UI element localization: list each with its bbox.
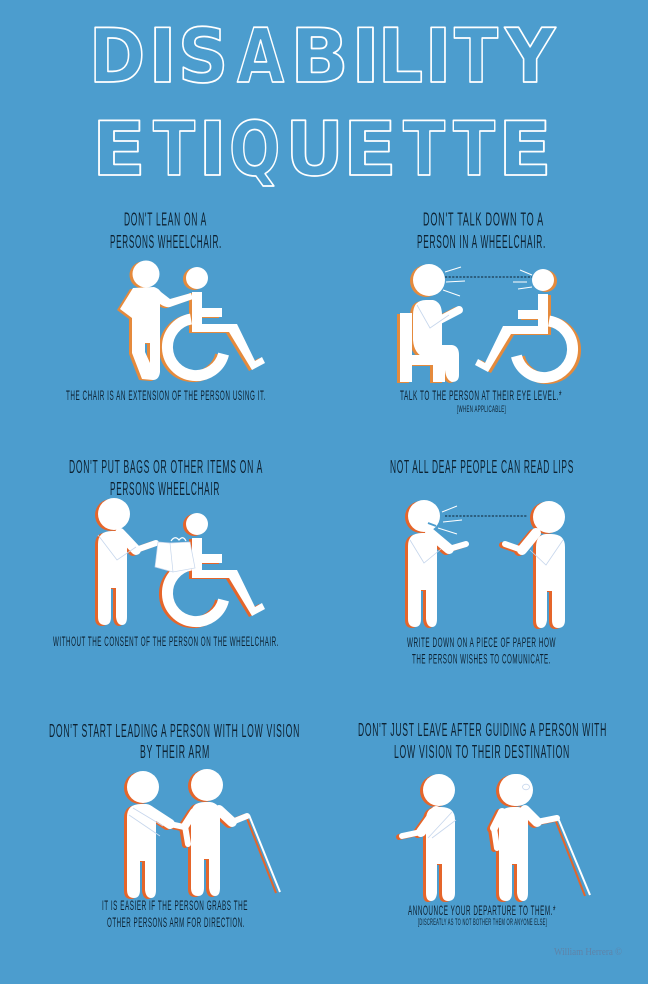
title: L (378, 12, 423, 100)
icon: person leaning on wheelchair (117, 260, 265, 381)
caption (407, 634, 556, 666)
icon: person placing bag on wheelchair (95, 498, 265, 626)
heading: PERSONS WHEELCHAIR (110, 479, 220, 499)
heading (417, 210, 546, 252)
icon: guide and person with cane (399, 774, 590, 902)
panel: don't lead by the arm (49, 721, 300, 930)
heading: BY THEIR ARM (140, 742, 210, 762)
panel: don't lean (66, 210, 266, 403)
title: S (178, 12, 229, 100)
title: T (454, 12, 498, 100)
title: I (351, 12, 380, 100)
title: D (89, 12, 145, 100)
heading (69, 457, 263, 499)
title (89, 12, 557, 193)
title: A (237, 12, 284, 100)
icon: shopping bag (155, 538, 195, 572)
signature: William Herrera © (554, 947, 622, 958)
panel: don't just leave (358, 720, 607, 927)
icon: person holding guide's arm with cane (124, 769, 280, 899)
title: E (343, 105, 397, 193)
caption (102, 897, 248, 930)
heading (110, 210, 222, 252)
title: I (198, 105, 227, 193)
panel: don't lead by the arm: OTHER PERSONS ARM FOR DIRECTION. (107, 914, 245, 930)
title: I (424, 12, 452, 100)
caption (408, 902, 556, 927)
icon: seated person facing wheelchair user (397, 264, 576, 383)
heading (49, 721, 300, 762)
panel: don't lean: PERSONS WHEELCHAIR. (110, 232, 222, 252)
title: Q (229, 105, 280, 193)
panel: don't put bags: DON'T PUT BAGS OR OTHER ITEMS ON A (69, 457, 263, 477)
title: I (148, 12, 177, 100)
panel: don't lead by the arm: IT IS EASIER IF THE PERSON GRABS THE (102, 897, 248, 913)
panel: don't talk down (397, 210, 576, 414)
text: WITHOUT THE CONSENT OF THE PERSON ON THE WHEELCHAIR. (53, 633, 279, 649)
caption (400, 387, 562, 414)
title: E (498, 105, 552, 193)
heading (358, 720, 607, 762)
panel: don't put bags (53, 457, 279, 649)
title: T (403, 105, 445, 193)
title: B (290, 12, 349, 100)
icon: two people talking (405, 500, 565, 629)
title: Y (504, 12, 557, 100)
title: T (153, 105, 195, 193)
text: THE CHAIR IS AN EXTENSION OF THE PERSON USING IT. (66, 387, 266, 403)
panel: not all deaf people read lips (390, 457, 574, 666)
title: U (285, 105, 344, 193)
title: E (92, 105, 146, 193)
text: DON'T START LEADING A PERSON WITH LOW VISION (49, 721, 300, 741)
caption: [WHEN APPLICABLE] (457, 404, 506, 414)
heading: DON'T LEAN ON A (124, 210, 207, 230)
title: T (453, 105, 495, 193)
